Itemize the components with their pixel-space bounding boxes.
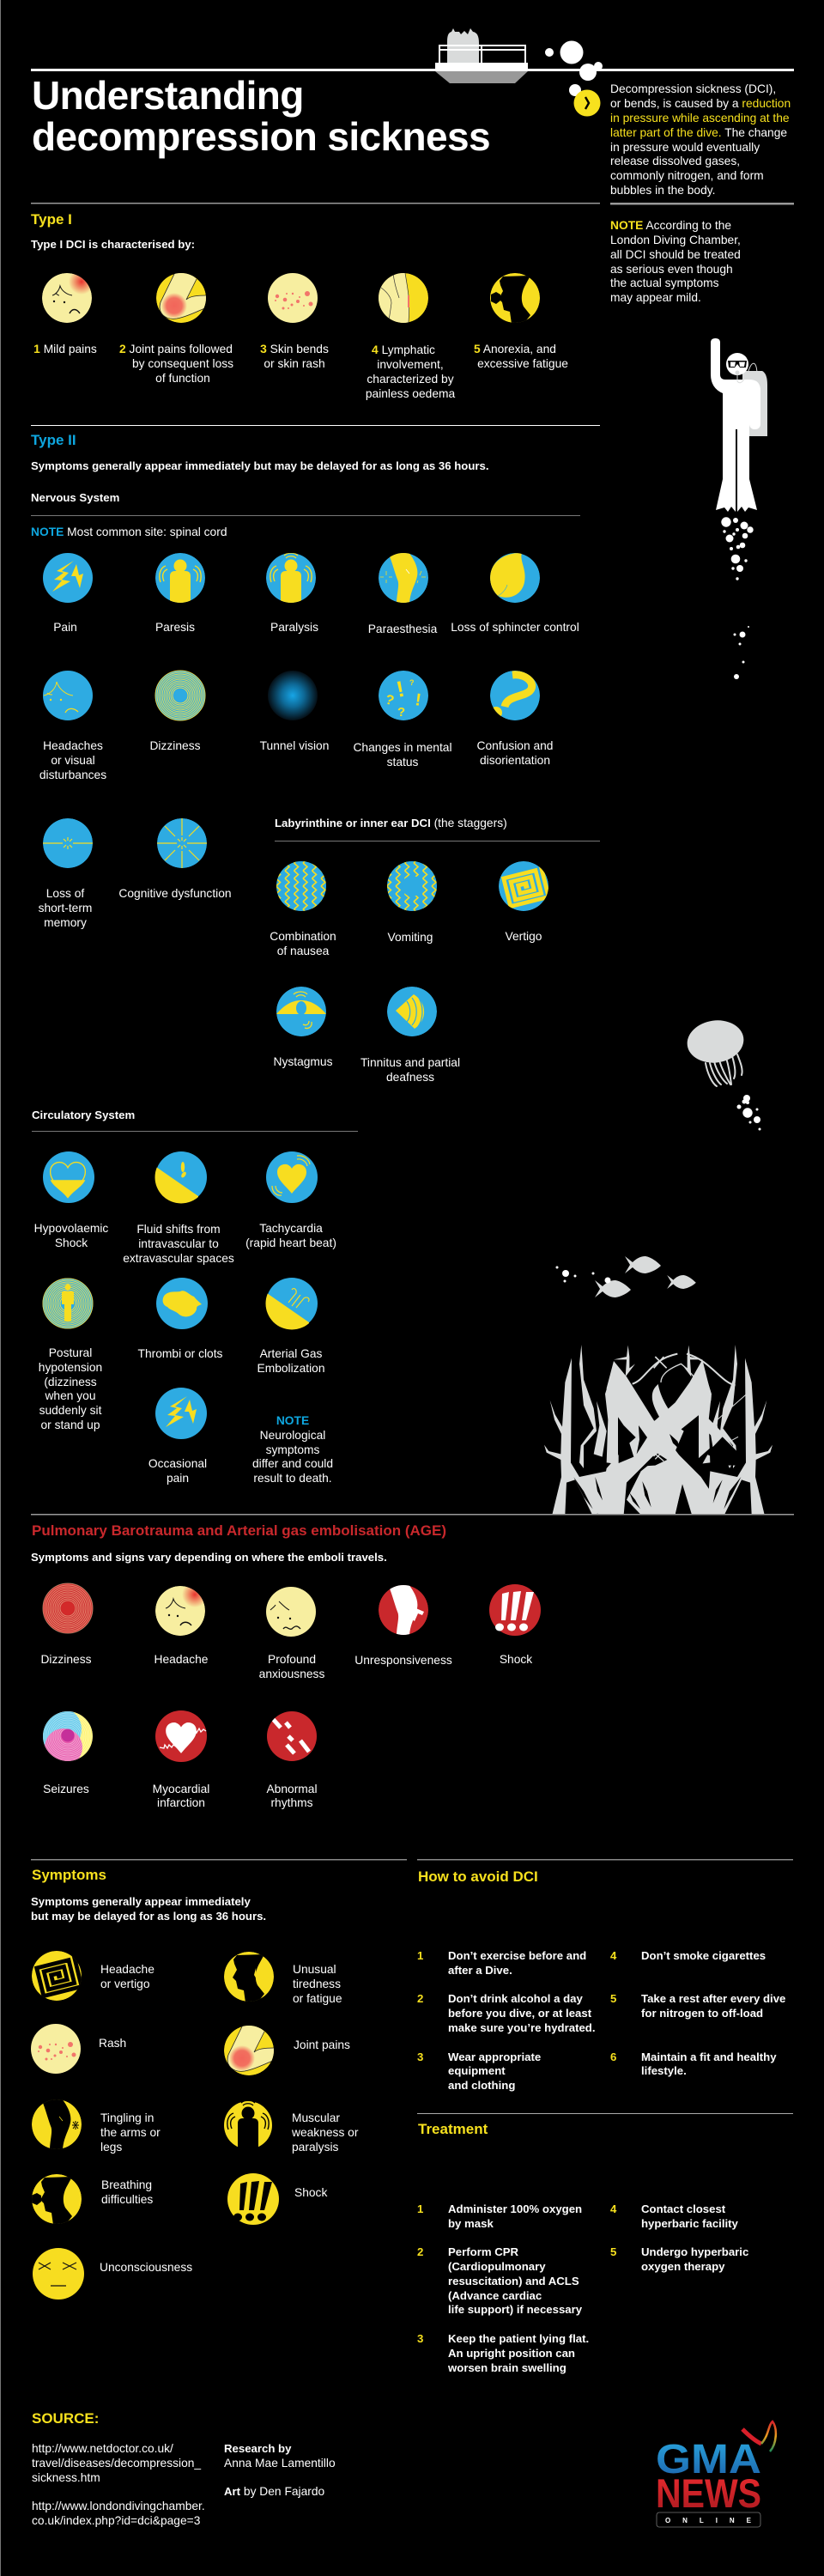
subheading: Circulatory System: Circulatory System — [32, 1109, 135, 1121]
item 3: equipment — [448, 2064, 506, 2077]
diver bubbles — [721, 517, 754, 679]
panel: treatment — [417, 2121, 748, 2374]
subheading: Type I characterised: Type I DCI is characterised by: — [31, 238, 195, 251]
icon: gas embolization — [264, 1278, 318, 1331]
label: abnormal rhythms: Abnormal — [266, 1783, 318, 1795]
icon: abnormal rhythms — [266, 1710, 318, 1762]
icon: joint pains symptom — [224, 2025, 275, 2075]
treatment 5: Undergo hyperbaric — [641, 2245, 748, 2258]
label: postural hypotension: or stand up — [40, 1419, 100, 1431]
title: Understanding — [32, 73, 304, 118]
heading: Type II: Type II — [31, 432, 76, 448]
label: muscular: Muscular — [292, 2111, 340, 2124]
icon: mental status: ! — [414, 690, 422, 710]
label: joint pains: of function — [155, 372, 210, 385]
label: headaches: Headaches — [43, 739, 103, 752]
icon: fluid shifts — [154, 1151, 207, 1205]
intro text: latter part of the dive. — [610, 126, 722, 139]
icon: anxious face — [266, 1587, 316, 1637]
icon: red dizziness — [43, 1583, 93, 1633]
icon: mental status: ? — [384, 692, 396, 708]
icon: thrombi — [156, 1278, 208, 1329]
treatment 4: Contact closest — [641, 2202, 726, 2215]
label: muscular: paralysis — [292, 2141, 339, 2154]
label: tingling: legs — [100, 2141, 122, 2154]
icon: rash symptom — [31, 2024, 81, 2074]
treatment 4: hyperbaric facility — [641, 2217, 739, 2230]
treatment 2: Perform CPR — [448, 2245, 519, 2258]
icon: myocardial infarction — [155, 1710, 207, 1762]
label: confusion: Confusion and — [477, 739, 553, 752]
label: tiredness: Unusual — [293, 1963, 336, 1976]
treatment 5: oxygen therapy — [641, 2260, 725, 2273]
label: tiredness: tiredness — [293, 1978, 341, 1990]
icon: nausea — [276, 861, 326, 911]
label: memory loss: memory — [44, 916, 87, 929]
item 3: 3 — [417, 2050, 423, 2063]
fish illustrations — [595, 1256, 696, 1297]
icon: skin rash — [268, 273, 318, 323]
label: unconsciousness: Unconsciousness — [100, 2261, 192, 2274]
subheading: symptoms delay: but may be delayed for as long as 36 hours. — [31, 1910, 266, 1923]
label: postural hypotension: suddenly sit — [39, 1404, 102, 1417]
logo: GMA News Online: GMA — [656, 2437, 761, 2482]
label: mild pains: 1 Mild pains — [33, 343, 97, 355]
item 5: Take a rest after every dive — [641, 1992, 785, 2005]
label: joint pains: by consequent loss — [132, 357, 233, 370]
icon: unresponsiveness — [379, 1584, 428, 1636]
icon: yellow arrow circle — [573, 89, 601, 117]
icon: red shock — [489, 1584, 541, 1636]
label: occasional pain: pain — [167, 1472, 189, 1485]
icon: headaches — [43, 671, 93, 720]
item 2: 2 — [417, 1992, 423, 2005]
icon: sphincter — [490, 553, 540, 603]
label: fluid shifts: Fluid shifts from — [136, 1223, 221, 1236]
label: postural hypotension: when you — [44, 1389, 96, 1402]
label: hypovolaemic: Shock — [55, 1236, 88, 1249]
fish bubbles — [556, 1266, 611, 1283]
logo: GMA News Online: ONLINE — [665, 2517, 752, 2524]
label: paresis: Paresis — [155, 621, 195, 634]
research credit: Research by — [224, 2442, 292, 2455]
art credit: Art by Den Fajardo — [224, 2485, 325, 2498]
panel: Type II — [31, 432, 600, 1084]
item 6: 6 — [610, 2050, 616, 2063]
intro text: reduction — [742, 97, 791, 110]
icon: mental status: ? — [409, 678, 414, 687]
label: seizures: Seizures — [43, 1783, 89, 1795]
label: postural hypotension: hypotension — [39, 1361, 102, 1374]
label: headache: Headache — [154, 1653, 209, 1666]
treatment 3: worsen brain swelling — [447, 2361, 566, 2374]
icon: paresis — [155, 553, 205, 603]
label: nausea: of nausea — [277, 945, 330, 957]
panel: sources — [32, 2410, 336, 2527]
jellyfish illustration — [684, 1017, 747, 1086]
label: anorexia: 5 Anorexia, and — [474, 343, 556, 355]
item 5: for nitrogen to off-load — [641, 2007, 763, 2020]
label: tachycardia: Tachycardia — [259, 1222, 323, 1235]
item 4: 4 — [610, 1949, 617, 1962]
icon: tunnel vision — [268, 671, 318, 720]
icon: muscular weakness — [224, 2101, 272, 2147]
subheading: Type II delay: Symptoms generally appear immediately but may be delayed for as long as 36 hours. — [31, 459, 489, 472]
note: neurological symptoms: NOTE — [276, 1414, 309, 1427]
label: nausea: Combination — [270, 930, 336, 943]
label: dizziness: Dizziness — [40, 1653, 92, 1666]
icon: joint pains — [156, 272, 207, 323]
heading: symptoms: Symptoms — [32, 1867, 106, 1883]
item 2: make sure you’re hydrated. — [448, 2021, 596, 2034]
icon: breathing — [31, 2174, 82, 2225]
label: shock: Shock — [500, 1653, 532, 1666]
label: hypovolaemic: Hypovolaemic — [34, 1222, 108, 1235]
label: shock: Shock — [294, 2186, 327, 2199]
icon: paraesthesia — [379, 552, 428, 604]
label: dizziness: Dizziness — [149, 739, 201, 752]
label: headache or vertigo: or vertigo — [100, 1978, 150, 1990]
label: myocardial: Myocardial — [153, 1783, 209, 1795]
item 4: Don’t smoke cigarettes — [641, 1949, 766, 1962]
note: London Diving Chamber: all DCI should be treated — [610, 248, 741, 261]
note: neurological symptoms: Neurological — [260, 1429, 325, 1442]
panel: Type I — [31, 211, 568, 400]
icon: cognitive dysfunction — [157, 818, 207, 868]
label: vomiting: Vomiting — [388, 931, 433, 944]
heading: treatment: Treatment — [418, 2121, 488, 2137]
icon: dizziness — [155, 671, 205, 720]
label: memory loss: Loss of — [46, 887, 84, 900]
source links: travel/diseases/decompression_ — [32, 2457, 201, 2470]
label: headache or vertigo: Headache — [100, 1963, 154, 1976]
label: myocardial: infarction — [157, 1796, 205, 1809]
item 1: Don’t exercise before and — [448, 1949, 586, 1962]
subheading: symptoms vary: Symptoms and signs vary depending on where the emboli travels. — [31, 1551, 387, 1564]
label: sphincter: Loss of sphincter control — [451, 621, 579, 634]
label: breathing: Breathing — [101, 2178, 152, 2191]
subheading: symptoms delay: Symptoms generally appear immediately — [31, 1895, 251, 1908]
item 5: 5 — [610, 1992, 616, 2005]
source links: http://www.netdoctor.co.uk/ — [32, 2442, 173, 2455]
label: joint pains: Joint pains — [294, 2038, 350, 2051]
treatment 4: 4 — [610, 2202, 617, 2215]
icon: seizures — [43, 1711, 93, 1761]
label: tingling: Tingling in — [100, 2111, 154, 2124]
icon: headache face — [155, 1586, 205, 1636]
note: London Diving Chamber: the actual symptoms — [610, 276, 719, 289]
diver illustration — [711, 338, 767, 512]
treatment 2: 2 — [417, 2245, 423, 2258]
treatment 2: resuscitation) and ACLS — [448, 2275, 579, 2287]
label: cognitive dysfunction: Cognitive dysfunction — [118, 887, 232, 900]
label: postural hypotension: Postural — [49, 1346, 92, 1359]
heading: Type I: Type I — [31, 211, 72, 228]
label: unresponsiveness: Unresponsiveness — [354, 1654, 452, 1667]
icon: tachycardia — [266, 1151, 318, 1203]
subheading: Labyrinthine: Labyrinthine or inner ear DCI (the staggers) — [275, 817, 507, 829]
label: tingling: the arms or — [100, 2126, 161, 2139]
icon: tinnitus — [387, 987, 437, 1036]
note: London Diving Chamber: as serious even though — [610, 263, 733, 276]
label: tachycardia: (rapid heart beat) — [245, 1236, 336, 1249]
label: lymphatic: 4 Lymphatic — [372, 343, 435, 356]
top surface line — [31, 69, 794, 71]
intro text: bubbles in the body. — [610, 184, 715, 197]
label: paralysis: Paralysis — [270, 621, 318, 634]
jellyfish bubbles — [736, 1095, 760, 1130]
label: occasional pain: Occasional — [148, 1457, 207, 1470]
label: tinnitus: Tinnitus and partial — [360, 1056, 460, 1069]
icon: vomiting — [387, 861, 437, 911]
label: tinnitus: deafness — [386, 1071, 434, 1084]
item 1: 1 — [417, 1949, 423, 1962]
item 3: and clothing — [448, 2079, 515, 2092]
item 6: lifestyle. — [641, 2064, 687, 2077]
source links: http://www.londondivingchamber. — [32, 2500, 205, 2512]
source links: co.uk/index.php?id=dci&page=3 — [32, 2514, 201, 2527]
icon: vertigo — [499, 861, 548, 911]
item 6: Maintain a fit and healthy — [641, 2050, 777, 2063]
label: mental status: status — [387, 756, 419, 769]
note: London Diving Chamber: may appear mild. — [610, 291, 701, 304]
heading: pulmonary barotrauma: Pulmonary Barotrauma and Arterial gas embolisation (AGE) — [32, 1522, 446, 1539]
panel: symptoms — [31, 1867, 359, 2300]
label: mental status: Changes in mental — [353, 741, 452, 754]
label: breathing: difficulties — [101, 2193, 153, 2206]
label: tiredness: or fatigue — [293, 1992, 342, 2005]
icon: pain — [43, 553, 93, 603]
icon: unconsciousness — [33, 2248, 84, 2300]
treatment 1: 1 — [417, 2202, 423, 2215]
treatment 2: life support) if necessary — [448, 2303, 583, 2316]
icon: shock symptom — [227, 2173, 279, 2225]
icon: memory loss — [43, 818, 93, 868]
note: London Diving Chamber: London Diving Chamber, — [610, 234, 741, 246]
treatment 5: 5 — [610, 2245, 616, 2258]
intro text: commonly nitrogen, and form — [610, 169, 764, 182]
icon: lymphatic — [379, 273, 428, 323]
panel: pulmonary barotrauma — [31, 1522, 541, 1809]
icon: postural hypotension — [43, 1278, 93, 1329]
intro text: release dissolved gases, — [610, 155, 740, 167]
label: gas embolization: Arterial Gas — [260, 1347, 322, 1360]
icon: tiredness profile — [224, 1952, 274, 2002]
label: muscular: weakness or — [291, 2126, 359, 2139]
logo: GMA News Online — [656, 2421, 776, 2527]
treatment 3: Keep the patient lying flat. — [448, 2332, 589, 2345]
label: rash: Rash — [99, 2037, 126, 2050]
heading: source: SOURCE: — [32, 2410, 99, 2427]
note: neurological symptoms: symptoms — [266, 1443, 320, 1456]
label: lymphatic: painless oedema — [366, 387, 455, 400]
seaweed illustration — [544, 1345, 772, 1515]
label: headaches: or visual — [51, 754, 95, 767]
note: neurological symptoms: differ and could — [252, 1457, 333, 1470]
label: vertigo: Vertigo — [506, 930, 542, 943]
subheading: Nervous System: Nervous System — [31, 491, 119, 504]
research credit: Anna Mae Lamentillo — [224, 2457, 336, 2470]
intro text: The change — [722, 126, 787, 139]
icon: mental status: ! — [394, 676, 407, 702]
label: thrombi: Thrombi or clots — [138, 1347, 223, 1360]
label: lymphatic: involvement, — [377, 358, 444, 371]
label: pain: Pain — [53, 621, 77, 634]
label: abnormal rhythms: rhythms — [270, 1796, 313, 1809]
icon: occasional pain — [155, 1388, 207, 1439]
icon: vertigo symptom — [32, 1951, 82, 2001]
panel: how to avoid DCI — [417, 1868, 785, 2092]
icon: anorexia profile — [490, 273, 540, 324]
label: tunnel vision: Tunnel vision — [260, 739, 329, 752]
icon: mild pains face — [42, 273, 92, 323]
icon: mental status — [379, 671, 428, 720]
treatment 3: An upright position can — [448, 2347, 575, 2360]
surface bubbles — [545, 41, 603, 96]
treatment 3: 3 — [417, 2332, 423, 2345]
intro text: in pressure would eventually — [610, 141, 760, 154]
intro text: in pressure while ascending at the — [610, 112, 790, 125]
treatment 2: (Advance cardiac — [448, 2289, 542, 2302]
label: lymphatic: characterized by — [367, 373, 454, 386]
label: anxiousness: Profound — [268, 1653, 316, 1666]
treatment 1: Administer 100% oxygen — [448, 2202, 582, 2215]
label: fluid shifts: extravascular spaces — [123, 1252, 234, 1265]
item 3: Wear appropriate — [448, 2050, 541, 2063]
label: memory loss: short-term — [39, 902, 92, 914]
label: nystagmus: Nystagmus — [273, 1055, 333, 1068]
item 2: Don’t drink alcohol a day — [448, 1992, 583, 2005]
icon: hypovolaemic shock — [43, 1151, 94, 1203]
item 2: before you dive, or at least — [448, 2007, 592, 2020]
treatment 1: by mask — [448, 2217, 494, 2230]
logo: GMA News Online: NEWS — [656, 2470, 761, 2516]
panel: circulatory system — [32, 1109, 358, 1485]
label: fluid shifts: intravascular to — [138, 1237, 219, 1250]
icon: nystagmus — [276, 987, 326, 1036]
label: anorexia: excessive fatigue — [477, 357, 568, 370]
source links: sickness.htm — [32, 2471, 100, 2484]
label: postural hypotension: (dizziness — [44, 1376, 97, 1388]
label: anxiousness: anxiousness — [259, 1668, 324, 1680]
icon: confusion — [490, 671, 540, 720]
note: neurological symptoms: result to death. — [253, 1472, 332, 1485]
icon: paralysis — [266, 553, 316, 603]
label: headaches: disturbances — [39, 769, 106, 781]
label: joint pains: 2 Joint pains followed — [119, 343, 233, 355]
icon: tingling leg — [32, 2099, 82, 2150]
label: skin bends: 3 Skin bends — [260, 343, 329, 355]
label: confusion: disorientation — [480, 754, 550, 767]
intro text: or bends, is caused by a — [610, 97, 742, 110]
icon: mental status: ? — [397, 705, 405, 720]
note: spinal cord: NOTE Most common site: spinal cord — [31, 526, 227, 538]
label: paraesthesia: Paraesthesia — [368, 623, 438, 635]
heading: how to avoid: How to avoid DCI — [418, 1868, 538, 1885]
intro text: Decompression sickness (DCI), — [610, 82, 776, 95]
item 1: after a Dive. — [448, 1964, 512, 1977]
label: skin bends: or skin rash — [264, 357, 325, 370]
note: London Diving Chamber: NOTE According to the — [610, 219, 731, 232]
ship illustration — [435, 28, 528, 83]
treatment 2: (Cardiopulmonary — [448, 2260, 546, 2273]
label: gas embolization: Embolization — [258, 1362, 324, 1375]
title: decompression sickness — [32, 114, 490, 159]
